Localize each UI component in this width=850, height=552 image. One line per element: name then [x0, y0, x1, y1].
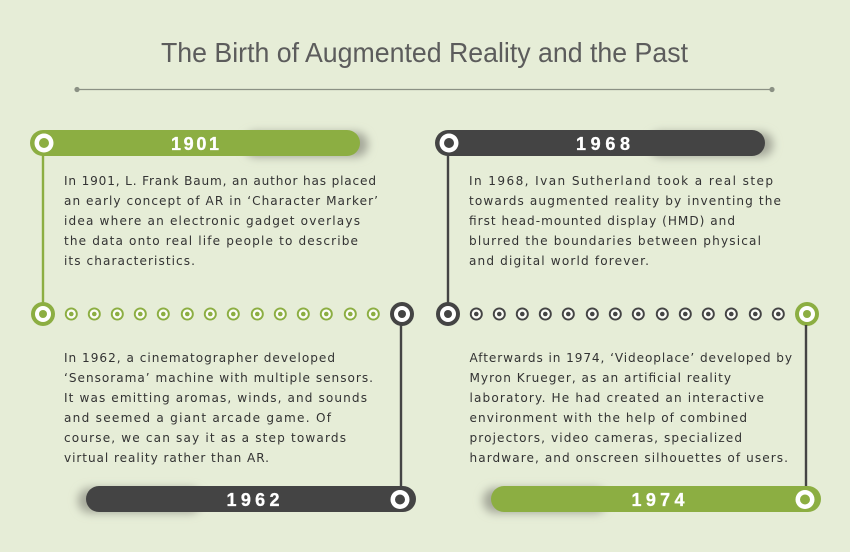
text block 1901: idea where an electronic gadget overlays [64, 214, 360, 228]
bar ring icon 1968 [440, 134, 458, 152]
text block 1962: It was emitting aromas, winds, and sounds [64, 391, 367, 405]
year bar 1901 [30, 130, 360, 156]
text block 1901: its characteristics. [64, 254, 195, 268]
text block 1901 [64, 174, 378, 268]
text block 1962: In 1962, a cinematographer developed [64, 351, 335, 365]
year label 1974: 1974 [632, 490, 684, 510]
text block 1974: Myron Krueger, as an artificial reality [470, 371, 731, 385]
year label 1968: 1968 [576, 134, 630, 154]
title divider line [74, 87, 775, 92]
text block 1968: first head-mounted display (HMD) and [469, 214, 735, 228]
dark dotted timeline [436, 302, 819, 326]
green dotted timeline [31, 302, 414, 326]
text block 1962: ‘Sensorama’ machine with multiple sensors. [64, 371, 373, 385]
text block 1968: In 1968, Ivan Sutherland took a real step [469, 174, 773, 188]
text block 1968: and digital world forever. [469, 254, 649, 268]
panel: 1901 [30, 130, 378, 305]
bar ring icon 1962 [390, 490, 410, 509]
text block 1974: laboratory. He had created an interactive [470, 391, 764, 405]
text block 1901: In 1901, L. Frank Baum, an author has placed [64, 174, 376, 188]
panel: 1968 [435, 130, 781, 305]
title: The Birth of Augmented Reality and the Past [161, 37, 688, 68]
year bar 1968 [435, 130, 765, 156]
text block 1968 [469, 174, 781, 268]
text block 1962: virtual reality rather than AR. [64, 451, 269, 465]
panel: 1962 [64, 325, 416, 513]
text block 1962: and seemed a giant arcade game. Of [64, 411, 332, 425]
text block 1974: environment with the help of combined [470, 411, 747, 425]
dark connector line 1974 [805, 325, 807, 490]
bar ring icon 1974 [796, 490, 814, 509]
text block 1962 [64, 351, 373, 465]
text block 1962: course, we can say it as a step towards [64, 431, 346, 445]
year bar 1974 [491, 486, 821, 512]
year bar 1962 [86, 486, 416, 512]
text block 1901: an early concept of AR in ‘Character Marker’ [64, 194, 378, 208]
green connector line 1901 [42, 150, 44, 305]
text block 1968: towards augmented reality by inventing the [469, 194, 781, 208]
text block 1901: the data onto real life people to describe [64, 234, 358, 248]
text block 1974 [470, 351, 792, 465]
year label 1962: 1962 [226, 490, 280, 510]
text block 1974: Afterwards in 1974, ‘Videoplace’ developed by [470, 351, 792, 365]
panel: 1974 [470, 325, 821, 513]
year label 1901: 1901 [171, 134, 219, 154]
text block 1968: blurred the boundaries between physical [469, 234, 761, 248]
text block 1974: hardware, and onscreen silhouettes of users. [470, 451, 788, 465]
bar ring icon 1901 [34, 134, 54, 152]
text block 1974: projectors, video cameras, specialized [470, 431, 742, 445]
dark connector line 1968 [447, 150, 449, 305]
dark connector line 1962 [400, 325, 402, 490]
